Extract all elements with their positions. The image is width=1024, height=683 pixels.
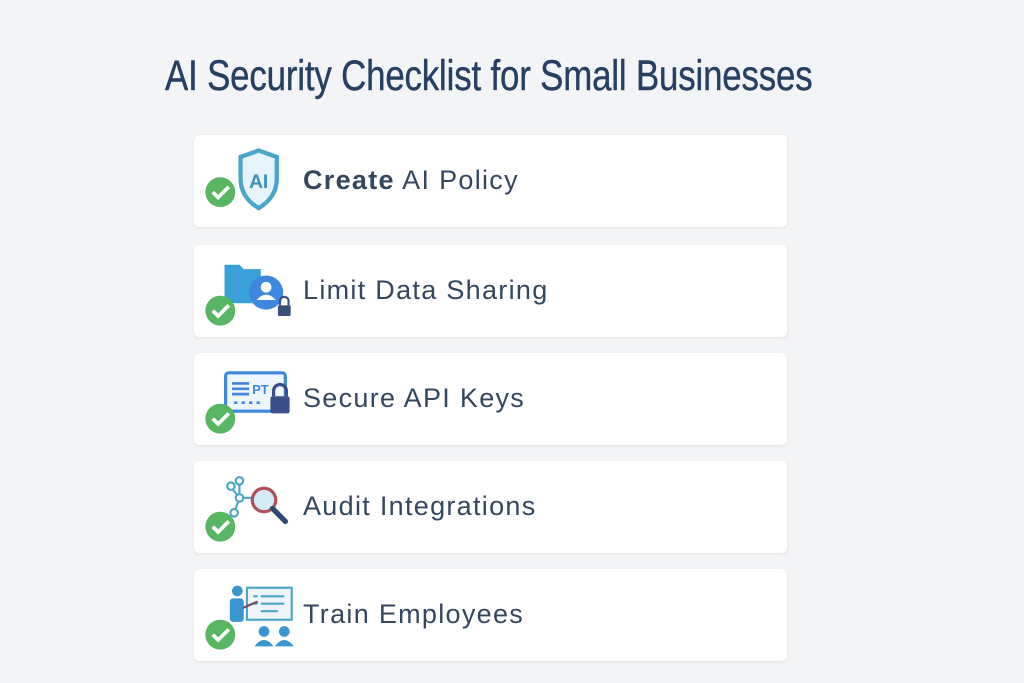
icon: folder user lock (205, 264, 291, 326)
label: Train Employees (303, 599, 524, 629)
card: audit integrations (194, 461, 787, 553)
label: Limit Data Sharing (303, 275, 549, 305)
icon: api key lock (205, 371, 290, 434)
icon: shield AI (205, 148, 279, 211)
icon: shield AI: AI (249, 172, 268, 193)
card: limit data sharing (194, 245, 787, 337)
icon: trainer board (205, 586, 294, 650)
card: secure API keys (194, 353, 787, 445)
label: Create AI Policy (303, 165, 519, 195)
card: create AI policy (194, 135, 787, 227)
label: Secure API Keys (303, 383, 525, 413)
icon: api key lock: PT (252, 382, 269, 397)
icon: nodes magnifier (205, 476, 288, 542)
card: train employees (194, 569, 787, 661)
label: Audit Integrations (303, 491, 537, 521)
title: AI Security Checklist for Small Businesses (165, 52, 812, 100)
